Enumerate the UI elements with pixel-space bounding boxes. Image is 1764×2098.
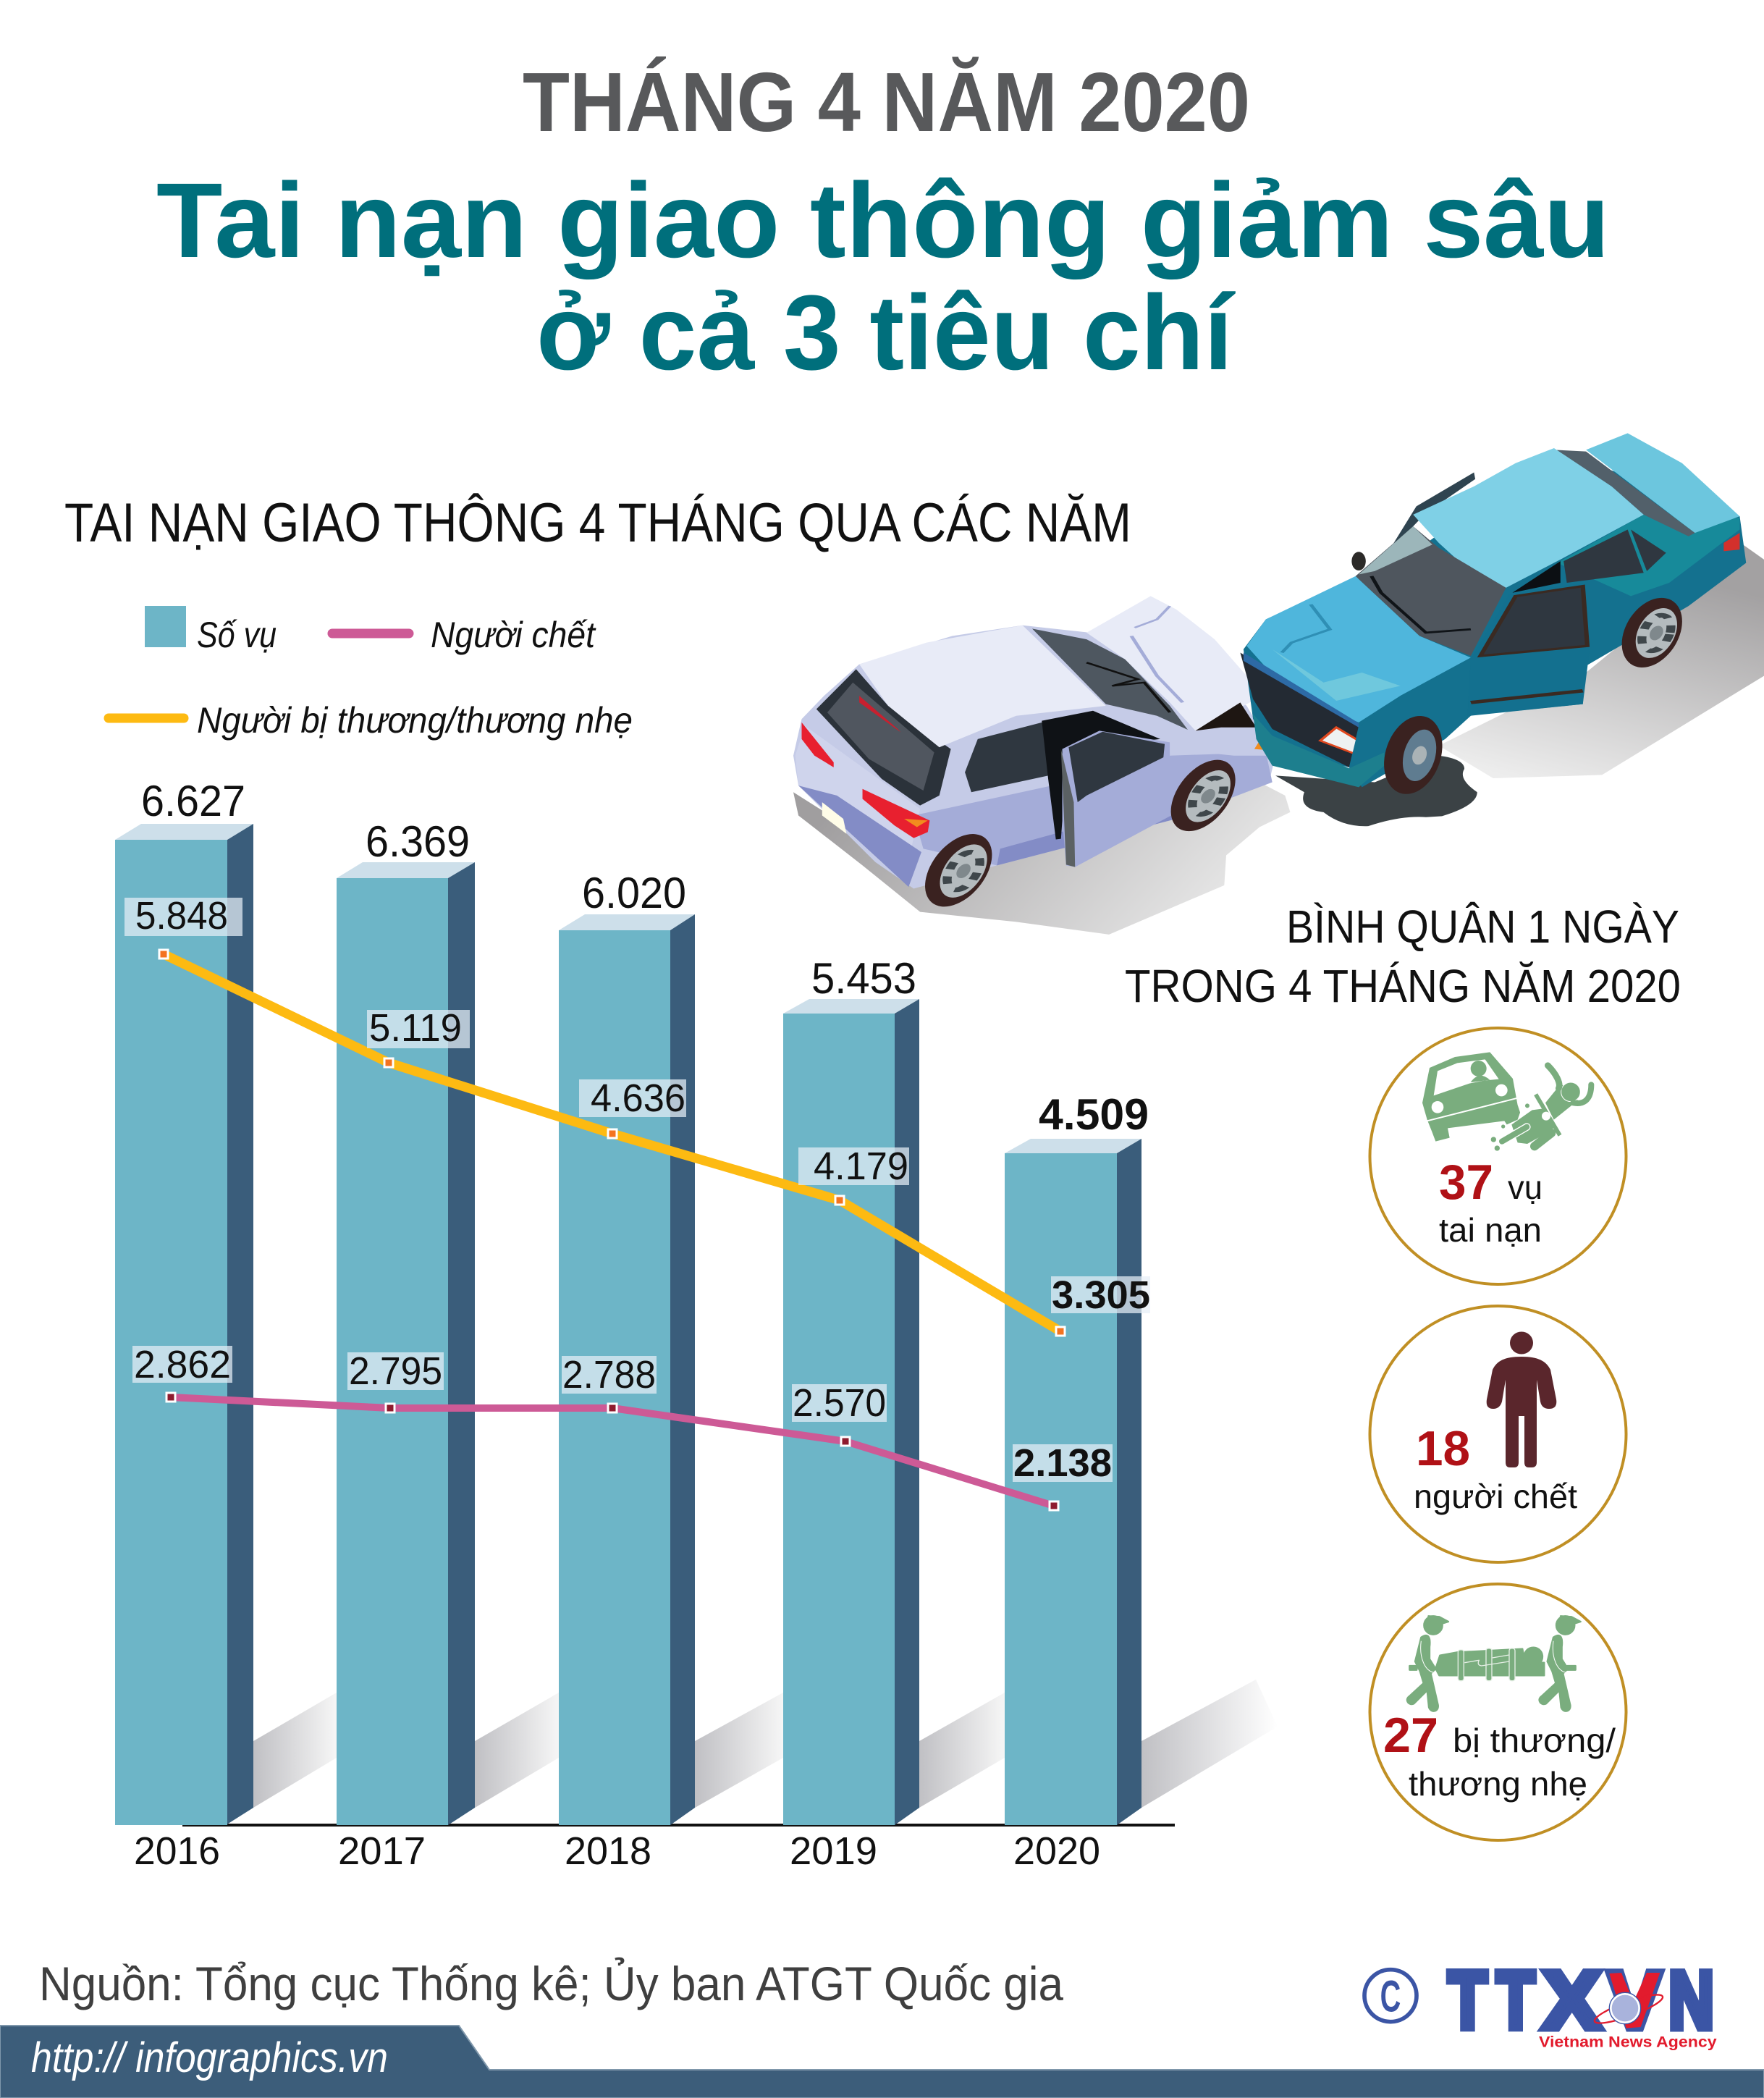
bar value labels: 6.020 xyxy=(582,869,686,917)
year labels: 2016 xyxy=(134,1829,220,1873)
line value labels: 2.788 xyxy=(562,1353,656,1396)
copyright mark: C xyxy=(1380,1972,1401,2022)
agency name: Vietnam News Agency xyxy=(1539,2033,1717,2050)
heading: month: THÁNG 4 NĂM 2020 xyxy=(523,55,1250,149)
stat: 37 vụ tai nạn: vụ xyxy=(1508,1168,1543,1206)
chart heading: TAI NẠN GIAO THÔNG 4 THÁNG QUA CÁC NĂM xyxy=(64,492,1131,554)
year labels xyxy=(134,1829,1100,1873)
stat: 27 bị thương/thương nhẹ: thương nhẹ xyxy=(1409,1765,1587,1803)
shadow: blue car xyxy=(1439,544,1764,778)
stat: 37 vụ tai nạn xyxy=(1439,1155,1543,1249)
year labels: 2020 xyxy=(1013,1829,1100,1873)
logo letters: T xyxy=(1448,1955,1487,2046)
blue car xyxy=(1240,433,1746,796)
bar value labels: 6.627 xyxy=(141,777,245,825)
line value labels xyxy=(125,894,1150,1485)
source note: Nguồn: Tổng cục Thống kê; Ủy ban ATGT Quốc gia xyxy=(39,1957,1063,2010)
line: người chết xyxy=(171,1397,1054,1506)
main title: ở cả 3 tiêu chí xyxy=(536,274,1236,392)
illustration: two crashed cars xyxy=(793,433,1764,935)
heading: daily average xyxy=(1125,901,1681,1012)
line value labels: 4.179 xyxy=(814,1145,908,1188)
line value labels: 2.862 xyxy=(134,1343,231,1386)
line value labels: 5.848 xyxy=(135,894,228,938)
stat: 18 người chết: người chết xyxy=(1414,1478,1577,1515)
heading: daily average: TRONG 4 THÁNG NĂM 2020 xyxy=(1125,960,1681,1012)
shadow: silver car xyxy=(793,783,1290,935)
circle: accidents per day xyxy=(1370,1028,1626,1284)
bar value labels xyxy=(141,777,1149,1139)
stat: 27 bị thương/thương nhẹ: 27 xyxy=(1383,1708,1438,1763)
bar value labels: 4.509 xyxy=(1039,1090,1149,1139)
logo letters: V xyxy=(1608,1955,1661,2046)
year labels: 2018 xyxy=(565,1829,651,1873)
logo: TTXVN xyxy=(1364,1955,1717,2050)
stat: 18 người chết xyxy=(1414,1421,1577,1515)
main title xyxy=(156,161,1610,392)
blue car wheels xyxy=(1377,595,1692,796)
circle: deaths per day xyxy=(1370,1306,1626,1562)
legend: người bị thương: Người bị thương/thương nhẹ xyxy=(197,700,633,741)
bar 2017 xyxy=(337,862,475,1825)
bar 2020 xyxy=(1005,1139,1141,1825)
year labels: 2017 xyxy=(338,1829,426,1873)
stat: 27 bị thương/thương nhẹ: bị thương/ xyxy=(1453,1722,1616,1759)
legend xyxy=(109,606,633,741)
line value labels: 4.636 xyxy=(591,1077,685,1120)
line value labels: 5.119 xyxy=(369,1006,462,1050)
bar shadows xyxy=(253,1680,1278,1808)
logo letters: T xyxy=(1496,1955,1535,2046)
bar and line chart xyxy=(115,777,1278,1873)
logo letters: N xyxy=(1668,1955,1714,2046)
main title: Tai nạn giao thông giảm sâu xyxy=(156,161,1610,280)
line value labels: 3.305 xyxy=(1052,1273,1150,1317)
icon: stretcher carriers xyxy=(1407,1616,1581,1711)
stat: 37 vụ tai nạn: tai nạn xyxy=(1439,1211,1542,1249)
year labels: 2019 xyxy=(790,1829,877,1873)
bar value labels: 6.369 xyxy=(366,817,470,866)
logo letters: X xyxy=(1543,1955,1601,2046)
line value labels: 2.138 xyxy=(1013,1441,1112,1485)
line markers xyxy=(159,950,1065,1510)
footer url: http:// infographics.vn xyxy=(31,2034,388,2081)
heading: daily average: BÌNH QUÂN 1 NGÀY xyxy=(1286,901,1679,953)
legend: số vụ xyxy=(145,606,277,655)
bar 2019 xyxy=(783,999,919,1825)
line: người bị thương xyxy=(164,954,1060,1331)
circle: injured per day xyxy=(1370,1584,1626,1840)
legend: người chết: Người chết xyxy=(431,615,596,655)
icon: person xyxy=(1487,1332,1556,1467)
stat: 37 vụ tai nạn: 37 xyxy=(1439,1155,1493,1210)
red V and globe xyxy=(1592,1973,1665,2029)
footer band xyxy=(0,2026,1764,2098)
line value labels: 2.570 xyxy=(793,1381,886,1425)
silver car xyxy=(793,596,1275,910)
logo letters xyxy=(1448,1955,1714,2046)
stat: 18 người chết: 18 xyxy=(1416,1421,1470,1476)
axis line xyxy=(182,1824,1175,1827)
bar value labels: 5.453 xyxy=(811,954,916,1003)
stat: 27 bị thương/thương nhẹ xyxy=(1383,1708,1616,1803)
legend: số vụ: Số vụ xyxy=(197,615,277,655)
line value labels: 2.795 xyxy=(349,1349,442,1393)
oil puddle xyxy=(1275,756,1477,826)
bar 2018 xyxy=(559,914,695,1825)
silver car wheels xyxy=(913,757,1247,910)
icon: car hitting motorbike xyxy=(1422,1052,1591,1151)
bar 2016 xyxy=(115,824,253,1825)
copyright mark xyxy=(1364,1970,1417,2022)
